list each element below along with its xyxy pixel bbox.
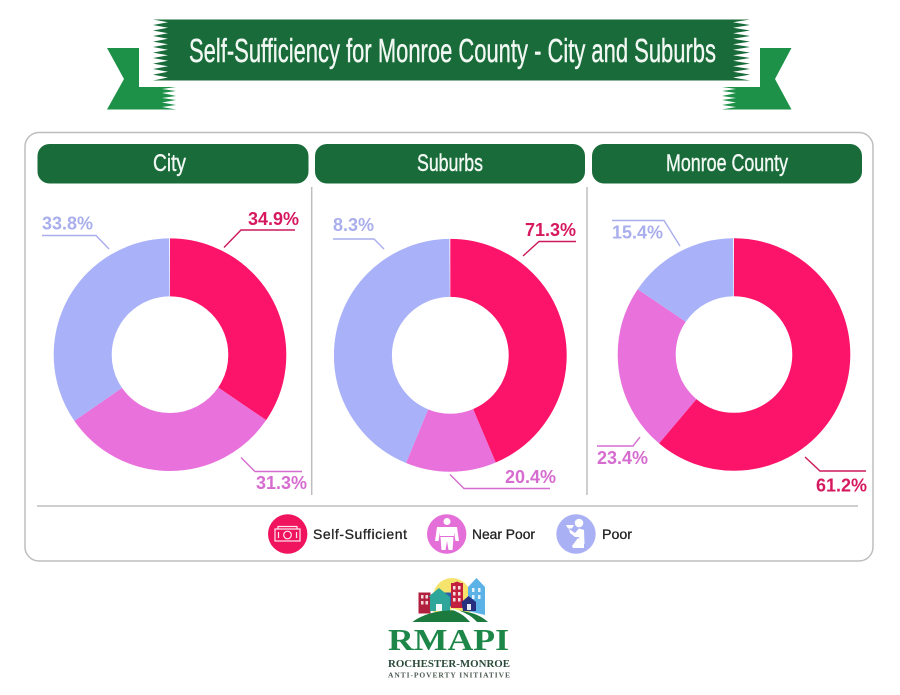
- column: Suburbs: [315, 144, 585, 488]
- label: City near poor 31.3%: 31.3%: [256, 473, 307, 493]
- banner ribbon: [153, 20, 750, 80]
- logo: RMAPI wordmark: RMAPI: [388, 622, 509, 657]
- title banner: [107, 20, 792, 110]
- donut chart: Monroe County: [647, 267, 821, 442]
- main panel: [25, 132, 873, 561]
- logo: skyline illustration: [418, 578, 485, 615]
- legend item: Near Poor: Near Poor: [472, 526, 535, 542]
- header: Suburbs: Suburbs: [417, 150, 483, 177]
- legend: [268, 514, 632, 554]
- label: Monroe poor 15.4%: 15.4%: [612, 223, 663, 243]
- label: Monroe self-sufficient 61.2%: 61.2%: [816, 476, 867, 496]
- header: Monroe County: [592, 144, 862, 184]
- label: Monroe self-sufficient 61.2%: [805, 457, 867, 496]
- label: Monroe near poor 23.4%: [597, 437, 648, 468]
- legend item: Near Poor: [427, 514, 535, 554]
- label: City poor 33.8%: [42, 214, 109, 249]
- banner left tail: [107, 48, 176, 110]
- legend item: Self-Sufficient: Self-Sufficient: [313, 526, 407, 542]
- panel frame: [25, 132, 873, 561]
- legend item: Poor: [556, 514, 632, 554]
- label: City self-sufficient 34.9%: [224, 209, 299, 248]
- header: Suburbs: [315, 144, 585, 184]
- header: Monroe County: Monroe County: [666, 150, 788, 177]
- column: City: [38, 144, 308, 493]
- label: Suburbs near poor 20.4%: 20.4%: [505, 467, 556, 487]
- header: City: [38, 144, 308, 184]
- label: Monroe poor 15.4%: [612, 220, 680, 246]
- banner right tail: [722, 48, 792, 110]
- label: Suburbs poor 8.3%: 8.3%: [333, 215, 374, 235]
- legend item: Self-Sufficient: [268, 514, 407, 554]
- label: Suburbs poor 8.3%: [333, 215, 384, 249]
- donut chart: Suburbs: [363, 268, 538, 443]
- donut chart: City: [83, 267, 257, 442]
- logo: Anti-Poverty Initiative line: ANTI-POVERTY INITIATIVE: [388, 670, 510, 679]
- label: City near poor 31.3%: [241, 458, 307, 493]
- header: City: City: [153, 150, 186, 177]
- column: Monroe County: [592, 144, 867, 496]
- logo: Rochester-Monroe line: ROCHESTER-MONROE: [388, 659, 510, 670]
- logo: green hill: [412, 608, 488, 622]
- label: Suburbs self-sufficient 71.3%: 71.3%: [525, 220, 576, 240]
- label: Suburbs near poor 20.4%: [450, 467, 556, 488]
- RMAPI logo: [388, 578, 510, 679]
- label: City self-sufficient 34.9%: 34.9%: [248, 209, 299, 229]
- label: City poor 33.8%: 33.8%: [42, 214, 93, 234]
- label: Suburbs self-sufficient 71.3%: [523, 220, 576, 256]
- label: Monroe near poor 23.4%: 23.4%: [597, 448, 648, 468]
- legend item: Poor: Poor: [602, 526, 632, 542]
